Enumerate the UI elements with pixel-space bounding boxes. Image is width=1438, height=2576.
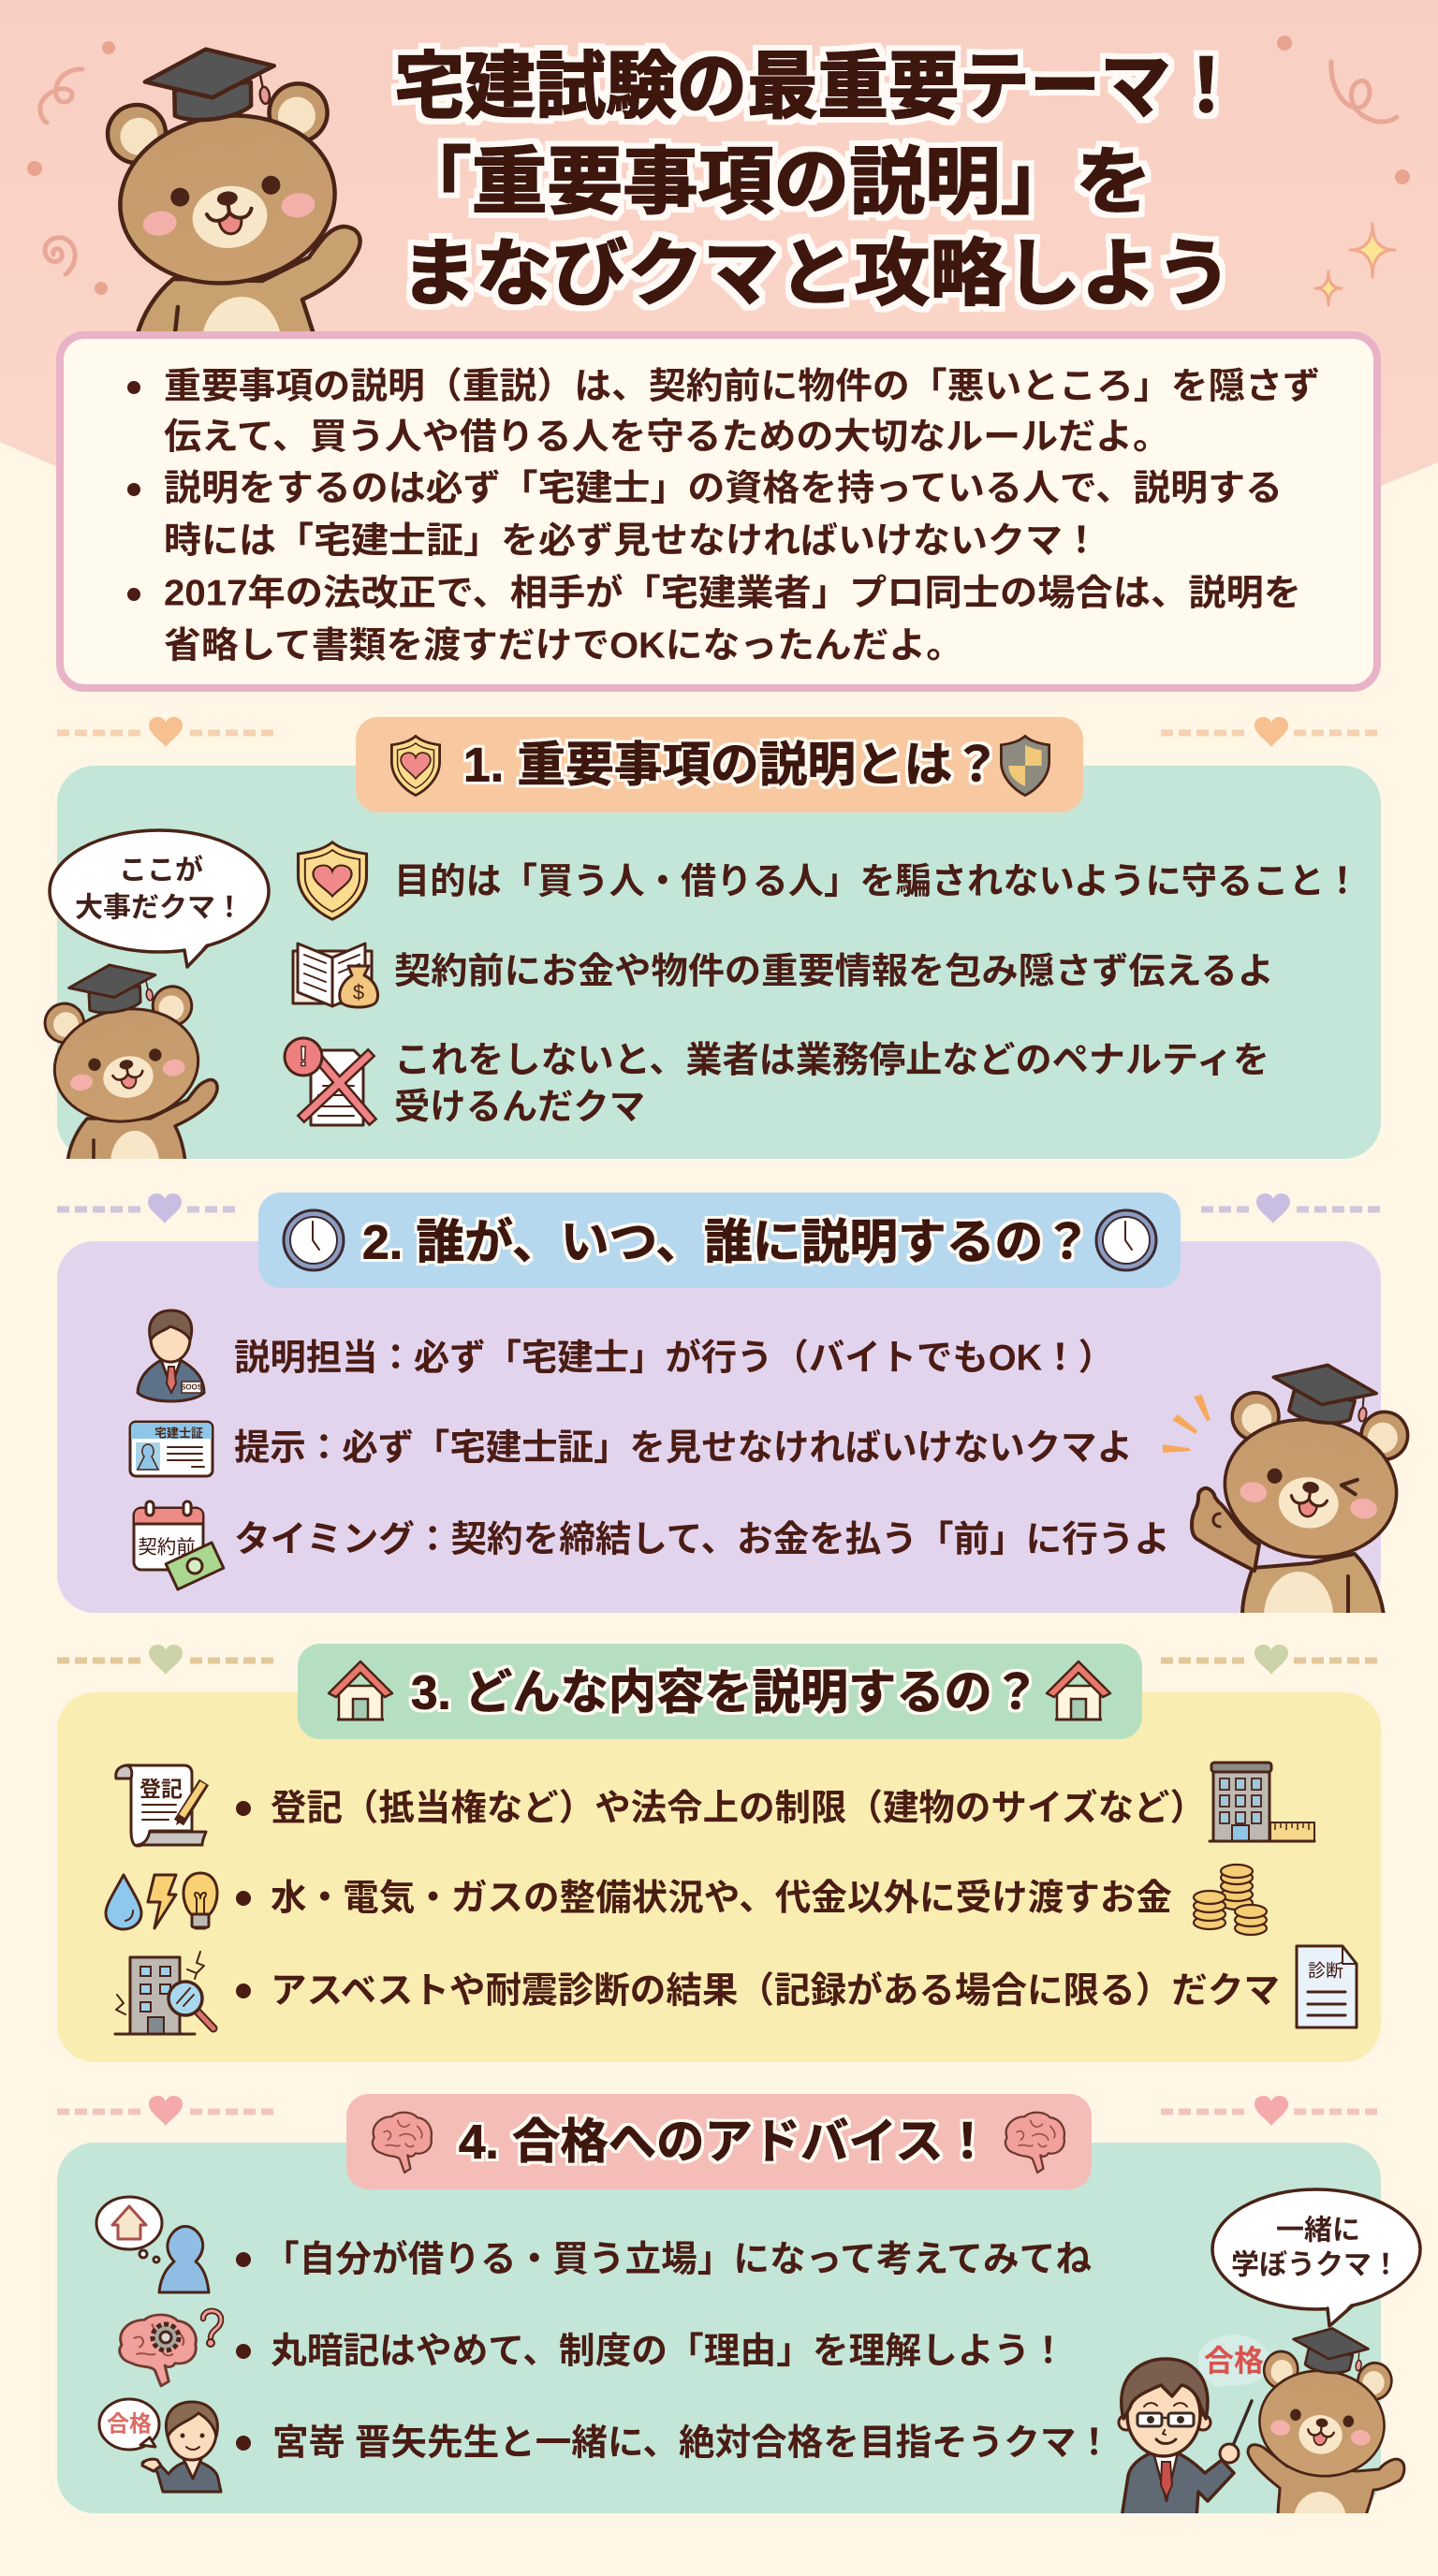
item text: 水・電気・ガス: 水・電気・ガスの整備状況や、代金以外に受け渡すお金: [271, 1878, 1172, 1919]
icon: house right: [1047, 1661, 1110, 1720]
icon: water drop, lightning, light bulb: [106, 1873, 217, 1929]
item text: 説明担当: 説明担当：必ず「宅建士」が行う（バイトでもOK！）: [234, 1339, 1114, 1378]
bear with raised arms, section 4: [1247, 2327, 1406, 2513]
pale 合格 bubble: 合格: [1204, 2344, 1264, 2378]
item text: 提示: 提示：必ず「宅建士証」を見せなければいけないクマよ: [234, 1428, 1133, 1468]
divider 3: [57, 1645, 1381, 1675]
speech bubble: 一緒に学ぼうクマ: 学ぼうクマ！: [1231, 2250, 1400, 2280]
item 3 text: これをしないと、業者は業務停止などのペナルティを: [394, 1041, 1269, 1080]
section 2 heading: 2. 誰が、いつ、誰に説明するの？: [362, 1215, 1092, 1269]
icon: stacks of coins: [1194, 1865, 1267, 1935]
speech bubble: ここが大事だクマ: ここが: [119, 854, 203, 886]
icon: crossed-out document with alert: !: [299, 1041, 308, 1073]
bear with cap, section 1: [43, 964, 219, 1159]
icon: shield with heart: [299, 842, 366, 919]
divider 1: [57, 717, 1381, 747]
section 3 heading: 3. どんな内容を説明するの？: [411, 1666, 1040, 1719]
intro bullet 1: 重要事項の説明（重説）は、契約前に物件の「悪いところ」を隠さず: [164, 367, 1320, 406]
item text: 丸暗記: 丸暗記はやめて、制度の「理由」を理解しよう！: [271, 2331, 1066, 2372]
icon: calendar and banknote: [134, 1501, 224, 1589]
icon: grey shield: [1001, 736, 1049, 796]
icon: small 合格 bubble and teacher: 合格: [107, 2411, 152, 2437]
icon: registry scroll with pencil: 登記: [139, 1777, 183, 1801]
section 4 header pill: [346, 2094, 1092, 2189]
item 3 text: [394, 1041, 1269, 1127]
confetti decoration: [27, 36, 1410, 305]
icon: person in suit: SOOS: [181, 1383, 203, 1391]
section 3 header pill: [298, 1644, 1142, 1739]
intro bullet 2: 説明をするのは必ず「宅建士」の資格を持っている人で、説明する: [164, 468, 1283, 509]
section 4 heading: 4. 合格へのアドバイス！: [459, 2115, 991, 2168]
intro bullet 3: 省略して書類を渡すだけでOKになったんだよ。: [164, 625, 963, 666]
title: 「重要事項の説明」を: [396, 140, 1152, 223]
icon: diagnosis document: 診断: [1308, 1960, 1343, 1981]
icon: house left: [329, 1661, 392, 1720]
item 2 text: 契約前にお金や物件の重要情報を包み隠さず伝えるよ: [394, 951, 1274, 992]
icon: person imagining a house: [96, 2197, 209, 2292]
icon: small 合格 bubble and teacher: [99, 2399, 221, 2492]
icon: heart shield: [391, 736, 440, 796]
icon: open book and money bag: $: [353, 981, 364, 1003]
icon: brain right: [1005, 2113, 1064, 2173]
icon: ID card: [130, 1422, 213, 1476]
panel: section 1: [37, 717, 1381, 1196]
pale 合格 bubble: [1198, 2334, 1271, 2387]
speech bubble: ここが大事だクマ: [50, 830, 269, 967]
panel: section 4: [57, 2094, 1420, 2548]
intro bullet 3: 2017年の法改正で、相手が「宅建業者」プロ同士の場合は、説明を: [164, 573, 1301, 614]
icon: clock right: [1096, 1210, 1156, 1270]
icon: registry scroll with pencil: [116, 1765, 206, 1846]
icon: crossed-out document with alert: [285, 1038, 370, 1125]
section 1 header pill: [356, 717, 1083, 812]
panel: section 3: [57, 1644, 1381, 2062]
icon: brain with gear and question mark: [120, 2311, 221, 2386]
title: まなびクマと攻略しよう: [401, 232, 1232, 315]
icon: open book and money bag: [293, 944, 377, 1007]
item text: アスベスト: アスベストや耐震診断の結果（記録がある場合に限る）だクマ: [271, 1971, 1280, 2011]
intro bullet 2: 時には「宅建士証」を必ず見せなければいけないクマ！: [164, 520, 1100, 562]
icon: diagnosis document: [1297, 1946, 1357, 2027]
intro bullet 1: 伝えて、買う人や借りる人を守るための大切なルールだよ。: [164, 417, 1170, 457]
section 2 header pill: [258, 1193, 1181, 1288]
icon: person in suit: [138, 1310, 204, 1401]
icon: cracked building and magnifier: [115, 1952, 213, 2034]
title: [394, 45, 1241, 315]
item 1 text: 目的は「買う人・借りる人」を騙されないように守ること！: [394, 861, 1360, 902]
item text: タイミング: タイミング：契約を締結して、お金を払う「前」に行うよ: [234, 1520, 1170, 1559]
title: 宅建試験の最重要テーマ！: [394, 45, 1241, 127]
speech bubble: 一緒に学ぼうクマ: 一緒に: [1276, 2215, 1360, 2247]
panel: section 2: [57, 1193, 1410, 1613]
intro bullet 3: [127, 573, 1301, 666]
icon: ID card: 宅建士証: [154, 1427, 203, 1440]
teacher with pointer: [1119, 2359, 1252, 2518]
icon: calendar and banknote: 契約前: [138, 1537, 196, 1558]
divider 2: [57, 1193, 1381, 1223]
icon: brain left: [373, 2113, 432, 2173]
item text: 登記: 登記（抵当権など）や法令上の制限（建物のサイズなど）: [271, 1788, 1206, 1829]
speech bubble: ここが大事だクマ: 大事だクマ！: [75, 893, 243, 923]
winking bear pointing, section 2: [1190, 1363, 1410, 1613]
intro bullet 2: [127, 468, 1283, 562]
orange spark lines: [1163, 1395, 1211, 1453]
intro bullet 1: [127, 367, 1320, 457]
section 1 heading: 1. 重要事項の説明とは？: [463, 738, 1001, 792]
item 3 text: 受けるんだクマ: [394, 1088, 645, 1127]
panel: intro summary: [60, 335, 1377, 688]
icon: clock left: [284, 1210, 344, 1270]
item text: 宮嵜 晋矢先生: 宮嵜 晋矢先生と一緒に、絶対合格を目指そうクマ！: [272, 2422, 1112, 2464]
speech bubble: 一緒に学ぼうクマ: [1212, 2189, 1420, 2326]
icon: building with ruler: [1210, 1763, 1314, 1841]
divider 4: [57, 2096, 1381, 2126]
mascot bear waving at top: [98, 35, 360, 396]
item text: 自分が借りる: 「自分が借りる・買う立場」になって考えてみてね: [263, 2239, 1092, 2280]
